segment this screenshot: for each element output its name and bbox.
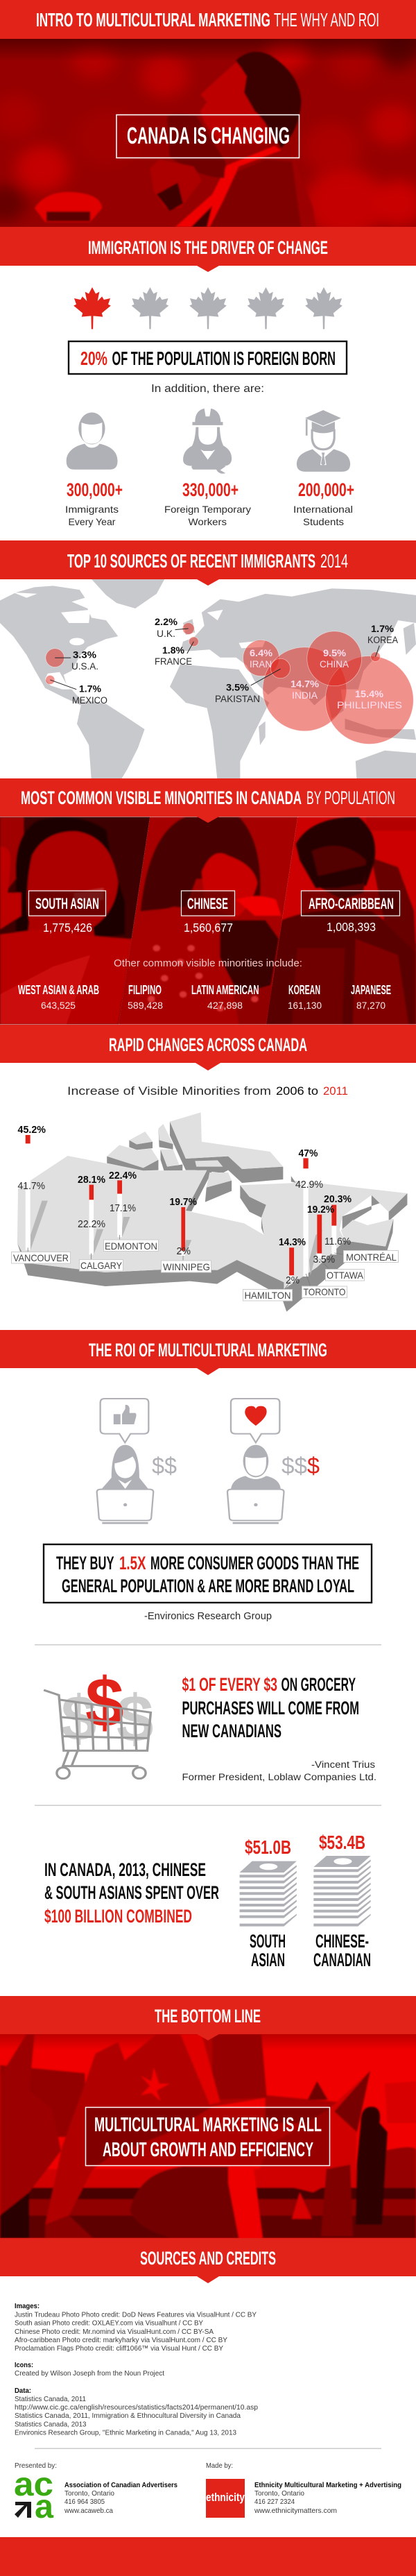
list: other visible minorities: 589,428 — [128, 1000, 163, 1011]
photo panel: the bottom line — [0, 2034, 416, 2238]
hero photo: Canada is changing — [0, 33, 416, 238]
icon: woman on laptop, thumbs up — [97, 1399, 177, 1524]
text block: data sources — [15, 2387, 258, 2437]
icon: worker with hard hat and wrench — [183, 409, 232, 475]
text block: image credits: Chinese Photo credit: Mr.nomind via VisualHunt.com / CC BY-SA — [15, 2328, 214, 2336]
map labels: 15.4% — [355, 689, 383, 699]
city value labels: 17.1% — [110, 1202, 136, 1214]
map labels — [71, 617, 402, 710]
stat: immigrants — [65, 413, 123, 527]
city value labels: 3.5% — [313, 1254, 335, 1265]
logo: ethnicity — [206, 2479, 245, 2518]
map labels: 3.5% — [226, 683, 249, 692]
city bars — [26, 1135, 336, 1281]
bubbles — [46, 623, 413, 744]
text block: icon credits — [15, 2361, 164, 2378]
icon: person — [67, 413, 118, 470]
text: spent over $100 billion: IN CANADA, 2013, CHINESE — [44, 1859, 206, 1880]
coat — [207, 160, 301, 227]
section banner: top 10 sources — [0, 540, 416, 586]
notch — [197, 2034, 219, 2040]
map labels: CHINA — [320, 659, 349, 669]
chart: Chinese-Canadian money stack: $53.4B — [319, 1832, 365, 1853]
label: South Asian: 1,775,426 — [43, 921, 92, 935]
stat: international students — [293, 410, 354, 527]
city name tags: HAMILTON — [244, 1290, 291, 1301]
text: in addition: In addition, there are: — [151, 383, 264, 395]
Canada land block — [17, 1112, 407, 1312]
chart: South Asian money stack — [240, 1836, 297, 1970]
chart: South Asian money stack: ASIAN — [251, 1950, 285, 1970]
city name tags: VANCOUVER — [13, 1252, 69, 1263]
list: other visible minorities: JAPANESE — [351, 983, 391, 997]
text: other minorities: Other common visible minorities include: — [114, 958, 302, 969]
label: South Asian: SOUTH ASIAN — [35, 895, 99, 912]
face — [200, 62, 266, 144]
icon: graduate — [297, 410, 350, 472]
map labels: U.S.A. — [71, 661, 98, 672]
city name tags: TORONTO — [304, 1286, 346, 1297]
section banner: top 10 sources: 2014 — [320, 550, 348, 572]
hero callout box — [116, 115, 300, 158]
photo panel: visible minorities — [0, 817, 416, 1025]
city value labels: 47% — [298, 1148, 318, 1159]
city name tags — [11, 1240, 398, 1301]
text: grocery purchases: $1 OF EVERY $3 — [182, 1674, 277, 1695]
text block: data sources: Statistics Canada, 2011, Immigration & Ethnocultural Diversity in Canada — [15, 2412, 241, 2420]
presented by: ACA: Association of Canadian Advertisers — [64, 2481, 177, 2489]
stat: immigrants: Immigrants — [65, 504, 119, 515]
turban and second man — [167, 114, 225, 178]
text block: data sources: Environics Research Group, "Ethnic Marketing in Canada," Aug 13, 2013 — [15, 2428, 236, 2437]
label: Afro-Caribbean — [301, 891, 399, 934]
section banner: sources — [0, 2238, 416, 2283]
list: other visible minorities: FILIPINO — [128, 983, 162, 997]
text: grocery purchases: ON GROCERY — [281, 1674, 356, 1695]
text block: image credits — [15, 2302, 257, 2353]
hair — [236, 52, 301, 148]
city name tags: OTTAWA — [327, 1270, 364, 1281]
list: other visible minorities: WEST ASIAN & ARAB — [18, 983, 99, 997]
city value labels: 22.4% — [109, 1170, 137, 1182]
city value labels: 19.2% — [307, 1204, 334, 1216]
title banner: INTRO TO MULTICULTURAL MARKETING — [36, 9, 270, 31]
stat: foreign temporary workers — [164, 409, 251, 527]
text block: image credits: Proclamation Flags Photo credit: cliff1066™ via Visual Hunt / CC BY — [15, 2344, 223, 2353]
map labels: MEXICO — [72, 695, 107, 706]
map lakes and bays — [13, 592, 266, 648]
map labels: 9.5% — [323, 648, 346, 658]
map labels: 1.7% — [371, 624, 394, 634]
icon: man on laptop, heart: $$ — [281, 1453, 307, 1478]
map land masses — [0, 579, 416, 783]
photo: Chinese woman — [116, 817, 300, 1025]
icon: shopping cart with dollars: $ — [85, 1664, 124, 1741]
label: Afro-Caribbean: 1,008,393 — [327, 920, 376, 934]
city name tags: WINNIPEG — [163, 1261, 210, 1272]
stat: immigrants: 300,000+ — [67, 479, 123, 500]
text: spent over $100 billion — [44, 1859, 219, 1927]
leader lines — [50, 629, 379, 690]
bottom line callout — [86, 2108, 330, 2166]
callout: buy 1.5x more — [44, 1544, 372, 1603]
city value labels: 22.2% — [78, 1218, 105, 1230]
logo: ACA: a — [35, 2489, 53, 2525]
label: Chinese: CHINESE — [187, 895, 228, 912]
callout: foreign born — [69, 341, 347, 374]
stat: foreign temporary workers: Foreign Temporary — [164, 504, 251, 515]
text block: image credits: Images: — [15, 2302, 40, 2310]
chart heading: 2006 to — [276, 1084, 318, 1098]
map labels: IRAN — [250, 659, 272, 669]
presented by: ACA: 416 964 3805 — [64, 2498, 105, 2506]
map labels: 1.8% — [162, 645, 184, 656]
callout: buy 1.5x more: 1.5X — [119, 1553, 146, 1573]
map labels: 6.4% — [250, 648, 272, 658]
map labels: PAKISTAN — [215, 694, 260, 704]
map labels: KOREA — [367, 635, 398, 645]
text block: image credits: Afro-caribbean Photo credit: markyharky via VisualHunt.com / CC BY — [15, 2336, 227, 2344]
attribution: Vincent Trius: -Vincent Trius — [311, 1759, 375, 1770]
city value labels: 11.6% — [324, 1236, 351, 1247]
city value labels: 42.9% — [295, 1179, 323, 1191]
city value labels: 19.7% — [169, 1196, 197, 1208]
list: other visible minorities: KOREAN — [288, 983, 320, 997]
world map: top 10 immigrant sources — [0, 579, 416, 783]
section banner: bottom line — [0, 1996, 416, 2034]
list: other visible minorities: 427,898 — [207, 1000, 243, 1011]
chart heading: Increase of Visible Minorities from — [67, 1084, 271, 1098]
map labels: 14.7% — [291, 679, 319, 690]
list: other visible minorities: 643,525 — [41, 1000, 76, 1011]
made by: Ethnicity: Made by: — [206, 2462, 233, 2470]
list: other visible minorities: 87,270 — [356, 1000, 385, 1011]
photo: South Asian woman — [0, 817, 159, 1025]
chart: Chinese-Canadian money stack — [313, 1832, 371, 1970]
chart: South Asian money stack: $51.0B — [245, 1836, 291, 1858]
city value labels: 41.7% — [18, 1180, 45, 1192]
chart: Chinese-Canadian money stack: CHINESE- — [315, 1931, 369, 1952]
photo: Afro-Caribbean man — [266, 817, 416, 1025]
city value labels: 20.3% — [324, 1193, 352, 1205]
text block: icon credits: Created by Wilson Joseph from the Noun Project — [15, 2369, 164, 2378]
list: other visible minorities: 161,130 — [288, 1000, 322, 1011]
hero callout box: CANADA IS CHANGING — [127, 123, 290, 149]
callout: foreign born: 20% — [80, 348, 107, 369]
logo: ACA: ac — [14, 2466, 53, 2503]
chart: South Asian money stack: SOUTH — [250, 1931, 286, 1952]
chart: Chinese-Canadian money stack: CANADIAN — [313, 1950, 371, 1970]
footer bar — [0, 2537, 416, 2576]
city value labels: 14.3% — [279, 1236, 306, 1248]
logo: ethnicity: ethnicity — [206, 2491, 245, 2504]
made by: Ethnicity: Ethnicity Multicultural Marketing + Advertising — [254, 2481, 401, 2489]
section banner: bottom line: THE BOTTOM LINE — [155, 2006, 261, 2027]
text block: image credits: South asian Photo credit: OXLAEY.com via Visualhunt / CC BY — [15, 2319, 203, 2327]
map labels: PHILLIPINES — [337, 700, 402, 710]
attribution: Vincent Trius: Former President, Loblaw Companies Ltd. — [182, 1772, 376, 1782]
callout: buy 1.5x more: THEY BUY — [56, 1553, 114, 1573]
hat — [35, 192, 102, 222]
map labels: 1.7% — [79, 684, 101, 694]
presented by: ACA: www.acaweb.ca — [64, 2507, 113, 2515]
city name tags: CALGARY — [80, 1260, 123, 1271]
attribution: Environics: -Environics Research Group — [144, 1610, 272, 1622]
icon: woman on laptop, thumbs up: $$ — [152, 1453, 177, 1478]
section banner: visible minorities — [0, 778, 416, 817]
chart: 3D map of Canada with city bars — [11, 1112, 407, 1312]
icon: man on laptop, heart: $ — [307, 1453, 320, 1478]
label: South Asian — [29, 891, 105, 935]
city value labels: 2% — [286, 1274, 300, 1286]
made by: Ethnicity — [206, 2462, 401, 2518]
title banner — [0, 0, 416, 39]
presented by: ACA: Presented by: — [15, 2462, 57, 2470]
text block: icon credits: Icons: — [15, 2361, 33, 2369]
text: grocery purchases — [182, 1674, 359, 1741]
presented by: ACA: Toronto, Ontario — [64, 2489, 114, 2498]
text: spent over $100 billion: $100 BILLION COMBINED — [44, 1906, 192, 1927]
text: grocery purchases: NEW CANADIANS — [182, 1721, 281, 1741]
made by: Ethnicity: 416 227 2324 — [254, 2498, 295, 2506]
city name tags: MONTRÉAL — [346, 1252, 397, 1263]
stat: international students: 200,000+ — [298, 479, 354, 500]
stat: international students: International — [293, 504, 353, 515]
city name tags: EDMONTON — [105, 1240, 157, 1252]
map labels: 3.3% — [73, 649, 96, 660]
notch — [197, 817, 219, 823]
section banner: immigration — [0, 227, 416, 272]
stat: foreign temporary workers: 330,000+ — [182, 479, 239, 500]
section banner: rapid changes — [0, 1025, 416, 1071]
stat: foreign temporary workers: Workers — [189, 516, 227, 527]
stat: immigrants: Every Year — [68, 516, 116, 527]
map labels: INDIA — [292, 690, 318, 701]
made by: Ethnicity: www.ethnicitymatters.com — [254, 2507, 337, 2515]
made by: Ethnicity: Toronto, Ontario — [254, 2489, 304, 2498]
text block: data sources: Statistics Canada, 2011 — [15, 2395, 86, 2403]
list: other visible minorities: LATIN AMERICAN — [191, 983, 259, 997]
text block: data sources: Statistics Canada, 2013 — [15, 2420, 87, 2428]
text block: image credits: Justin Trudeau Photo Photo credit: DoD News Features via VisualHunt / CC BY — [15, 2310, 257, 2319]
list: other visible minorities — [18, 983, 391, 1011]
icon row: five maple leaves — [73, 287, 343, 329]
city value labels: 45.2% — [18, 1124, 46, 1136]
icon: shopping cart with dollars — [44, 1664, 153, 1779]
label: Chinese — [182, 891, 234, 935]
map labels: U.K. — [157, 629, 175, 639]
icon: shopping cart with dollars: $ — [116, 1682, 153, 1756]
chart heading — [67, 1084, 348, 1098]
presented by: ACA — [14, 2462, 177, 2525]
map labels: FRANCE — [155, 656, 192, 667]
attribution: Vincent Trius — [182, 1759, 376, 1782]
icon: shopping cart with dollars: $ — [61, 1683, 96, 1754]
icon: man on laptop, heart — [227, 1399, 320, 1524]
city value labels: 28.1% — [78, 1174, 105, 1186]
bar shadows — [31, 1201, 322, 1275]
city value labels: 2% — [176, 1245, 191, 1257]
label: Chinese: 1,560,677 — [184, 921, 233, 935]
section banner: ROI — [0, 1330, 416, 1375]
section banner: sources: SOURCES AND CREDITS — [140, 2248, 276, 2269]
logo: ACA — [14, 2466, 53, 2525]
map labels: 2.2% — [155, 617, 177, 627]
text block: data sources: Data: — [15, 2387, 31, 2395]
text block: data sources: http://www.cic.gc.ca/english/resources/statistics/facts2014/permanent/10.asp — [15, 2403, 258, 2412]
stat: international students: Students — [303, 516, 344, 527]
chart heading: 2011 — [323, 1084, 348, 1098]
text: spent over $100 billion: & SOUTH ASIANS SPENT OVER — [44, 1882, 219, 1903]
city value labels — [18, 1124, 352, 1286]
